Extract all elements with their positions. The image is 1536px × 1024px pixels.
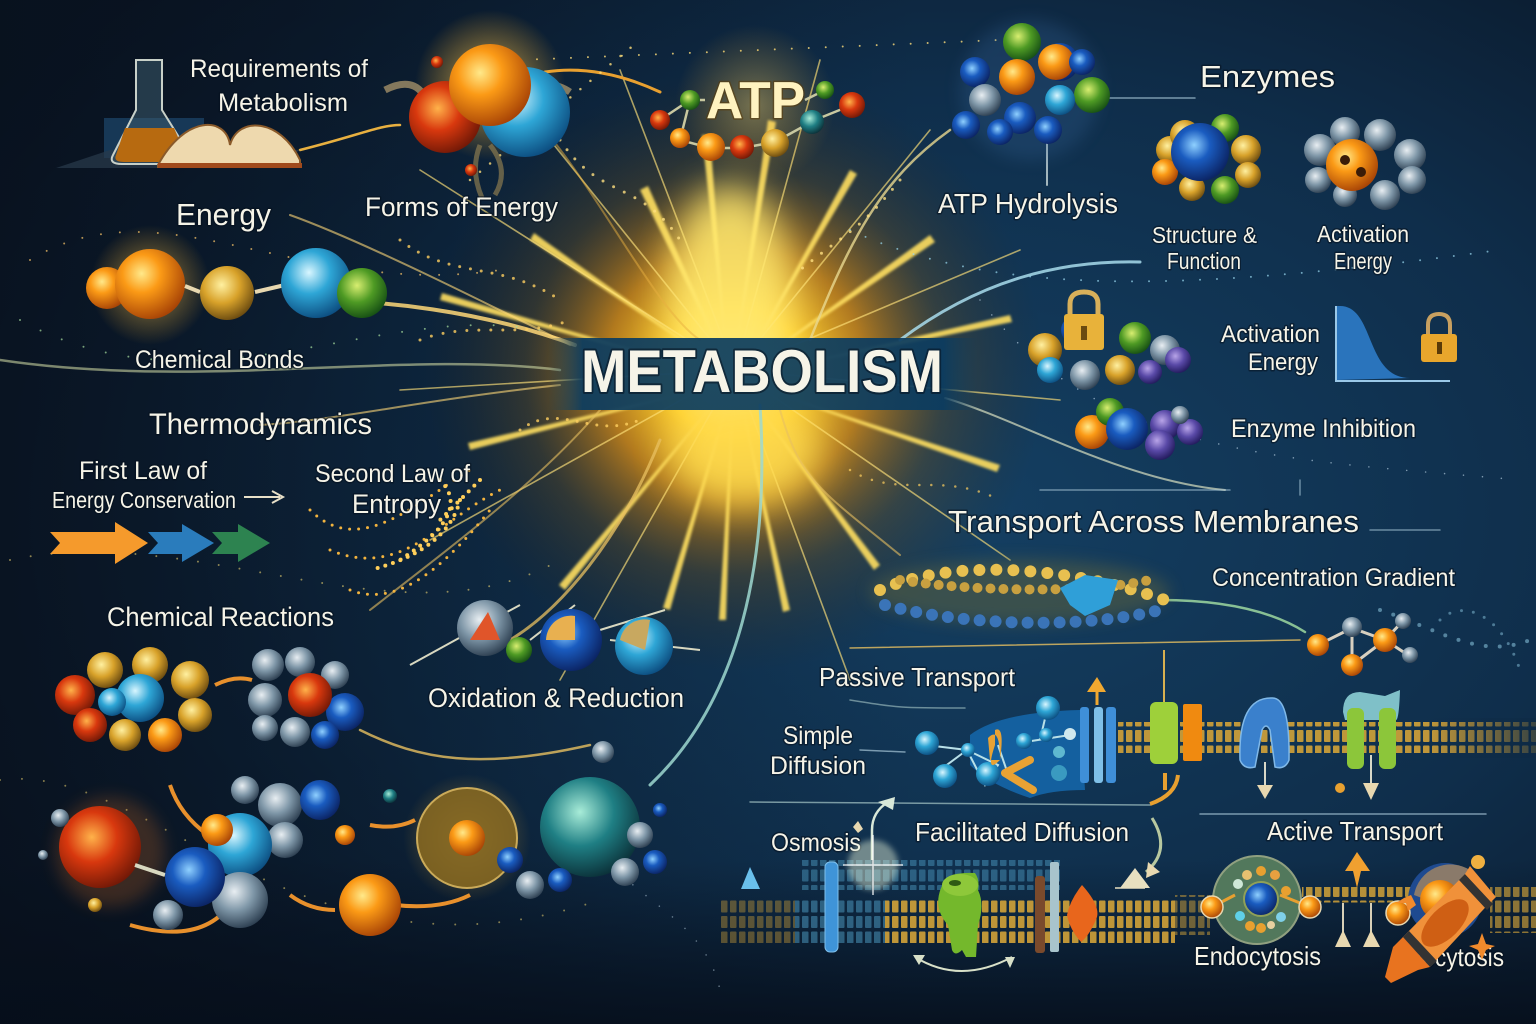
label: simple diffusion	[770, 722, 866, 780]
icon: active transport arrows	[1335, 852, 1380, 947]
icon: padlock	[1421, 314, 1457, 362]
icon: enzyme inhibition cluster	[1075, 398, 1203, 460]
label: enzyme inhibition: Enzyme Inhibition	[1231, 415, 1416, 443]
label: simple diffusion: Simple	[783, 722, 853, 750]
label: atp hydrolysis: ATP Hydrolysis	[938, 188, 1118, 219]
label: activation energy: Activation	[1221, 321, 1320, 348]
chart: activation energy curve	[1336, 306, 1450, 381]
atp label: ATP	[706, 72, 805, 130]
icon: green carrier protein lower	[913, 873, 1015, 971]
label: activation energy: Energy	[1248, 349, 1318, 376]
connector curves	[0, 70, 1486, 814]
icon: chemical reaction clusters	[55, 647, 364, 752]
icon: transport molecule band	[870, 560, 1170, 624]
label: requirements of metabolism: Requirements of	[190, 55, 368, 83]
icon: lab flask and book	[56, 60, 302, 168]
icon: diffusion channel protein	[915, 677, 1116, 798]
label: chemical reactions: Chemical Reactions	[107, 602, 334, 632]
label: structure and function	[1152, 222, 1257, 274]
upper membrane	[1118, 718, 1536, 758]
label: structure and function: Structure &	[1152, 222, 1257, 248]
label: passive transport: Passive Transport	[819, 662, 1016, 692]
label: chemical bonds: Chemical Bonds	[135, 346, 304, 374]
icon: ATP molecule	[650, 25, 865, 185]
label: forms of energy: Forms of Energy	[365, 192, 558, 222]
label: activation energy small	[1317, 221, 1409, 274]
label: activation energy small: Activation	[1317, 221, 1409, 247]
icon: energy chemical bonds spheres	[86, 225, 387, 345]
icon: law arrows	[50, 491, 283, 564]
label: first law	[52, 457, 236, 513]
label: structure and function: Function	[1167, 248, 1241, 274]
label: first law: First Law of	[79, 457, 207, 485]
label: second law: Second Law of	[315, 460, 470, 488]
label: first law: Energy Conservation	[52, 487, 236, 513]
label: enzymes: Enzymes	[1200, 59, 1335, 94]
label: second law	[315, 460, 470, 519]
label: osmosis: Osmosis	[771, 829, 861, 857]
metabolism title: METABOLISM	[581, 338, 943, 405]
icon: locked enzyme cluster	[1028, 292, 1191, 390]
label: activation energy	[1221, 321, 1320, 376]
label: requirements of metabolism	[190, 55, 368, 117]
label: second law: Entropy	[352, 489, 441, 519]
label: oxidation and reduction: Oxidation & Reduction	[428, 683, 684, 713]
icon: channels and orange gate	[1035, 818, 1161, 953]
label: energy: Energy	[176, 197, 271, 232]
label: active transport: Active Transport	[1267, 816, 1444, 846]
icon: bottom-left reaction chain	[38, 741, 667, 936]
icon: structure and function enzyme	[1152, 114, 1261, 204]
label: simple diffusion: Diffusion	[770, 752, 866, 780]
label: thermodynamics: Thermodynamics	[149, 408, 372, 441]
icon: concentration molecule	[1307, 613, 1418, 676]
central starburst	[400, 60, 1060, 680]
icon: green carrier protein	[1335, 690, 1400, 800]
icon: osmosis sparkle and channel	[825, 835, 903, 952]
icon: orange crayon	[1385, 866, 1496, 983]
label: activation energy small: Energy	[1334, 248, 1392, 274]
icon: forms of energy spheres	[385, 10, 570, 198]
lower membrane	[720, 860, 1536, 943]
label: concentration gradient: Concentration Gradient	[1212, 564, 1455, 592]
icon: green and orange channel	[1150, 650, 1202, 804]
entropy sparkle cloud	[310, 470, 500, 595]
icon: endocytosis vesicle	[1201, 856, 1321, 944]
label: endocytosis: Endocytosis	[1194, 941, 1321, 971]
label: transport across membranes: Transport Across Membranes	[948, 504, 1359, 539]
label: exocytosis: Exocytosis	[1396, 942, 1504, 972]
label: facilitated diffusion: Facilitated Diffusion	[915, 817, 1129, 847]
label: requirements of metabolism: Metabolism	[218, 89, 348, 117]
icon: exocytosis vesicle	[1386, 855, 1485, 937]
icon: blue channel protein	[1240, 698, 1289, 799]
icon: enzymes molecule cluster	[952, 20, 1110, 160]
icon: oxidation and reduction molecules	[410, 600, 700, 675]
arrow: osmosis upward	[853, 797, 895, 860]
icon: activation energy enzyme	[1304, 117, 1426, 210]
